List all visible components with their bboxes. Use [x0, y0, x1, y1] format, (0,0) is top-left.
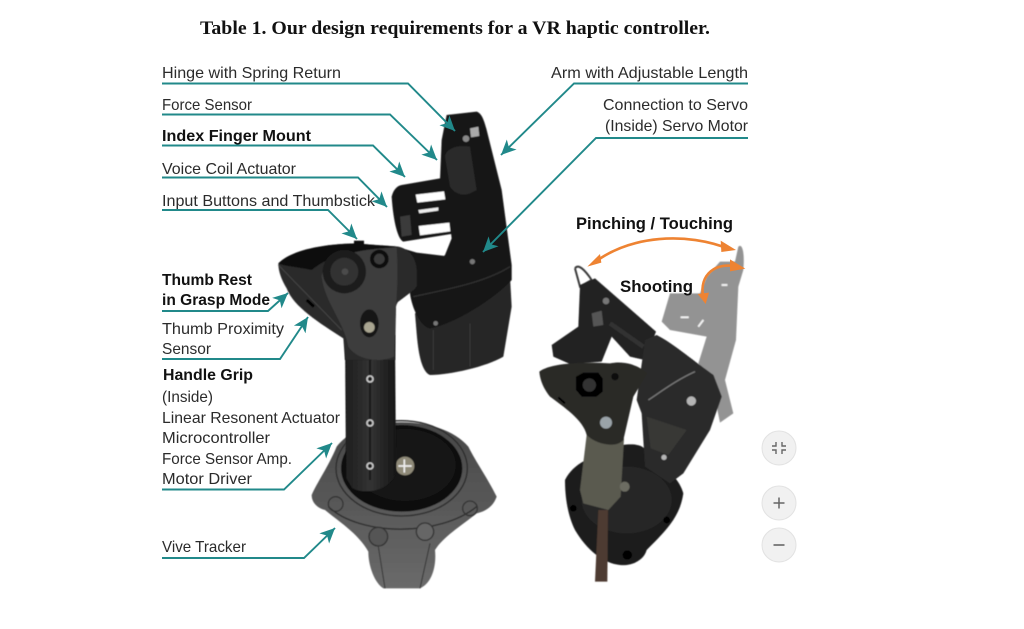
callout: Handle Grip: [162, 367, 341, 490]
callout: Arm with Adjustable Length: [501, 65, 748, 155]
handle column: [345, 335, 396, 491]
fingertip position controller: [539, 267, 722, 582]
callout: Voice Coil Actuator: Voice Coil Actuator: [162, 161, 297, 178]
callout: Vive Tracker: [162, 528, 335, 558]
callout: Thumb Proximity Sensor: Thumb Proximity: [162, 321, 284, 338]
photo: physical controller: [539, 246, 744, 582]
button: zoom out: [762, 528, 796, 562]
callout: Handle Grip: Handle Grip: [163, 367, 253, 384]
callout: Handle Grip: (Inside): [162, 389, 213, 406]
label: Pinching / Touching: Pinching / Touching: [576, 214, 733, 233]
cable: [595, 510, 608, 582]
title: Table 1. Our design requirements for a VR haptic controller.: [200, 18, 710, 39]
callout: Thumb Rest in Grasp Mode: Thumb Rest: [162, 272, 253, 289]
arrow: shooting arc: [698, 259, 745, 304]
callout: Hinge with Spring Return: [162, 65, 455, 131]
thumb head: [278, 243, 417, 360]
callout: Hinge with Spring Return: Hinge with Spring Return: [162, 65, 341, 82]
callout: Force Sensor: Force Sensor: [162, 97, 253, 114]
callout: Connection to Servo, Servo Motor: [483, 97, 749, 252]
callout: Voice Coil Actuator: [162, 161, 387, 207]
callout: Handle Grip: Linear Resonent Actuator: [162, 410, 341, 427]
label: Shooting: Shooting: [620, 277, 693, 296]
callout: Thumb Rest in Grasp Mode: in Grasp Mode: [162, 292, 270, 309]
callout: Thumb Proximity Sensor: Sensor: [162, 341, 212, 358]
callout: Index Finger Mount: [162, 128, 405, 177]
callout: Vive Tracker: Vive Tracker: [162, 539, 247, 556]
callout: Thumb Rest in Grasp Mode: [162, 272, 288, 311]
callout: Input Buttons and Thumbstick: [162, 193, 376, 239]
callout: Arm with Adjustable Length: Arm with Adjustable Length: [551, 65, 748, 82]
arm: [410, 112, 512, 328]
callout: Input Buttons and Thumbstick: Input Buttons and Thumbstick: [162, 193, 376, 210]
arm and servo: [637, 335, 722, 483]
ghosted shooting position: [662, 246, 744, 423]
callout: Connection to Servo, Servo Motor: (Inside) Servo Motor: [605, 118, 749, 135]
upper assembly: [278, 112, 512, 375]
callout: Connection to Servo, Servo Motor: Connection to Servo: [603, 97, 748, 114]
illustration: CAD model of controller: [278, 112, 512, 588]
finger mount: [392, 178, 455, 242]
grip sleeve: [580, 435, 624, 510]
head to arm bridge: [397, 247, 445, 302]
base: [565, 444, 683, 565]
callout: Handle Grip: Microcontroller: [162, 430, 271, 447]
callout: Handle Grip: Force Sensor Amp.: [162, 451, 292, 468]
arrow: pinching arc: [587, 238, 736, 267]
button: collapse view: [762, 431, 796, 465]
callout: Handle Grip: Motor Driver: [162, 471, 253, 488]
callout: Force Sensor: [162, 97, 437, 160]
vive tracker base: [312, 421, 497, 588]
loop and finger arm: [575, 267, 592, 287]
thumb plate: [539, 362, 647, 445]
callout: Thumb Proximity Sensor: [162, 317, 308, 359]
button: zoom in: [762, 486, 796, 520]
callout: Index Finger Mount: Index Finger Mount: [162, 128, 312, 145]
servo housing: [415, 277, 512, 375]
